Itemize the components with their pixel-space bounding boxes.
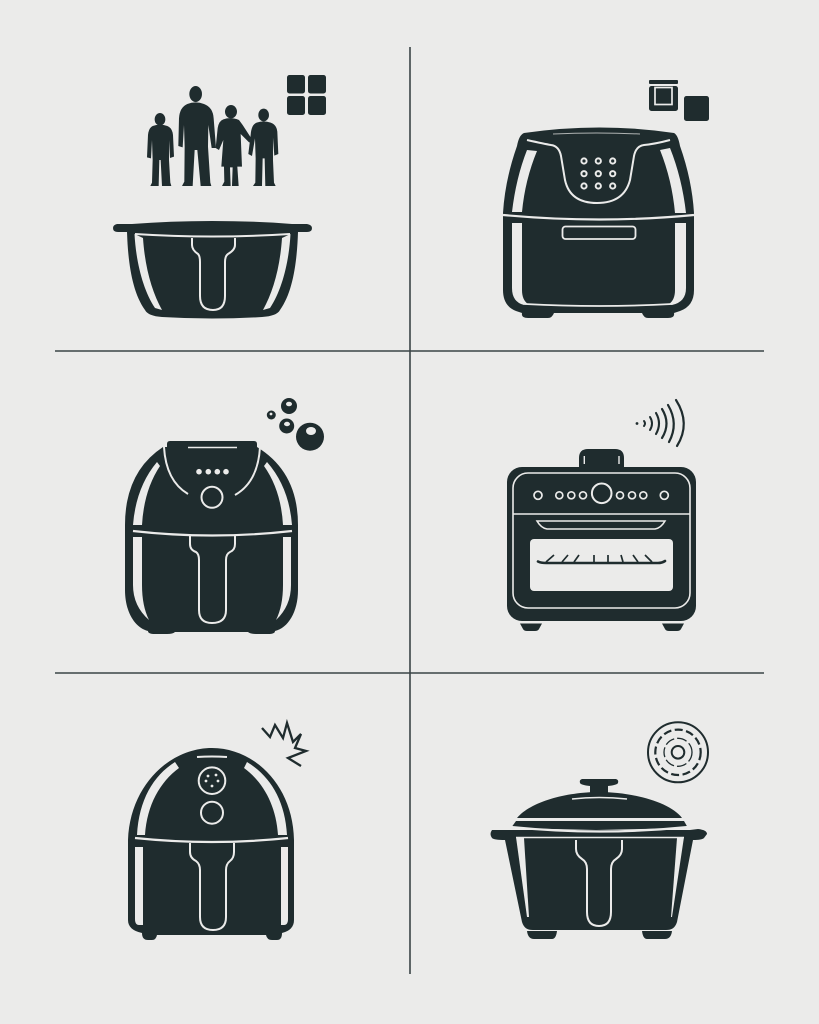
icon: bubbles (267, 398, 324, 451)
icon: round air fryer (125, 441, 298, 634)
icon: wireless signal (636, 400, 684, 446)
icon: shallow pot (113, 221, 312, 318)
panel: slow cooker pot (490, 722, 708, 939)
icon: lidded pot (490, 779, 707, 939)
icon: noise burst (262, 723, 306, 766)
icon: heating disc (648, 722, 708, 782)
icon: family silhouettes (147, 86, 278, 186)
icon: dome fryer (128, 748, 294, 940)
panel: large air fryer (503, 80, 709, 318)
panel: dome air fryer (128, 723, 306, 940)
panel: steam air fryer (125, 398, 324, 634)
panel: toaster oven (507, 400, 696, 631)
icon: container squares (649, 80, 709, 121)
icon: wide air fryer (503, 128, 694, 318)
icon: four squares (287, 75, 326, 115)
icon: oven (507, 449, 696, 631)
panel: family-size pot (113, 75, 326, 318)
